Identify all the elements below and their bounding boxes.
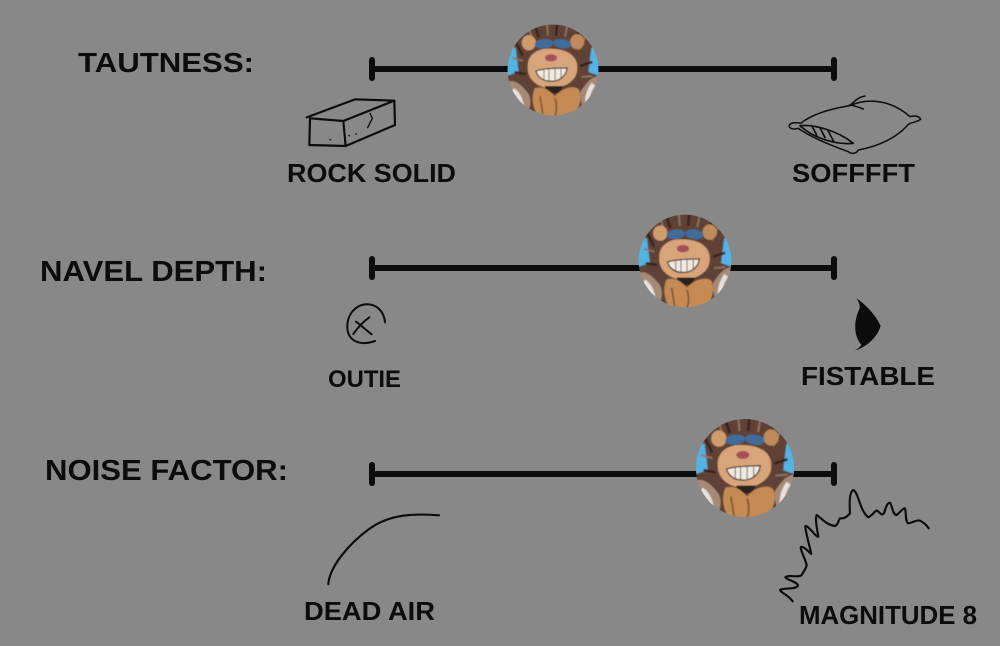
heading: navel depth: NAVEL DEPTH: <box>40 256 267 288</box>
label: dead air: DEAD AIR <box>304 596 435 626</box>
label: rock solid: ROCK SOLID <box>287 158 456 188</box>
slider marker: lion avatar on tautness <box>507 24 599 117</box>
label: outie: OUTIE <box>328 366 401 393</box>
heading: noise factor: NOISE FACTOR: <box>45 455 288 487</box>
slider: navel depth <box>372 259 834 277</box>
heading: tautness: TAUTNESS: <box>78 47 254 78</box>
icon: rock block <box>307 99 395 146</box>
slider: noise factor <box>372 465 834 483</box>
slider marker: lion avatar on navel depth <box>638 214 732 309</box>
slider: tautness <box>372 60 834 78</box>
icon: fistable navel <box>855 298 881 351</box>
label: fistable: FISTABLE <box>801 361 935 391</box>
label: sofffft: SOFFFFT <box>792 158 915 188</box>
icon: magnitude 8 noise wave <box>780 490 929 601</box>
slider marker: lion avatar on noise factor <box>695 418 795 519</box>
icon: outie navel <box>347 304 385 343</box>
icon: dead air curve <box>328 515 439 584</box>
icon: pillow <box>789 96 921 153</box>
label: magnitude 8: MAGNITUDE 8 <box>799 600 977 630</box>
